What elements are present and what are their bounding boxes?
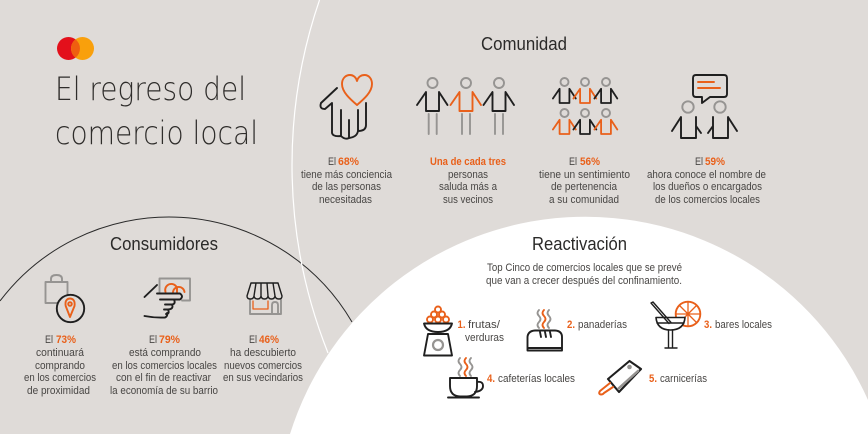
text: una de cada tres: Una de cada tres bbox=[430, 156, 506, 168]
text: 46%: ha descubierto bbox=[230, 347, 296, 359]
text: 59%: ahora conoce el nombre de bbox=[647, 169, 766, 181]
text: 68%: necesitadas bbox=[319, 194, 372, 206]
text: 56%: El bbox=[569, 156, 577, 168]
text: 79%: está comprando bbox=[129, 347, 201, 359]
item 2: panaderías: 2. bbox=[567, 319, 575, 331]
text: 73%: continuará bbox=[36, 347, 85, 359]
icon: six people bbox=[553, 78, 617, 134]
text: 79%: con el fin de reactivar bbox=[116, 372, 211, 384]
icon: scale with fruit bbox=[424, 306, 452, 356]
title bbox=[55, 70, 258, 152]
text: 46%: 46% bbox=[259, 334, 279, 346]
item 3: bares locales: 3. bbox=[704, 319, 712, 331]
text: 56%: 56% bbox=[580, 156, 600, 168]
text: 56%: tiene un sentimiento bbox=[539, 169, 630, 181]
text: una de cada tres: personas bbox=[448, 169, 488, 181]
item 1: frutas verduras: verduras bbox=[465, 332, 504, 344]
black arc: consumers area bbox=[0, 217, 352, 322]
text: 73% bbox=[24, 334, 96, 397]
text: 46%: nuevos comercios bbox=[224, 360, 302, 372]
text: 59%: de los comercios locales bbox=[655, 194, 760, 206]
item 2: panaderías: panaderías bbox=[578, 319, 627, 331]
title: El regreso del bbox=[55, 70, 246, 108]
item 1: frutas verduras: 1. bbox=[458, 319, 466, 331]
text: 46% bbox=[223, 334, 303, 384]
text: 68%: de las personas bbox=[312, 181, 381, 193]
icon: coffee cup with steam bbox=[448, 358, 483, 398]
icon: hand holding card bbox=[144, 278, 190, 318]
text: 46%: El bbox=[249, 334, 257, 346]
text: 56%: a su comunidad bbox=[549, 194, 619, 206]
text: 56% bbox=[539, 156, 630, 206]
item 4: cafeterías locales: cafeterías locales bbox=[498, 373, 575, 385]
item 4: cafeterías locales: 4. bbox=[487, 373, 495, 385]
text: 73%: comprando bbox=[35, 360, 85, 372]
text: 79%: 79% bbox=[159, 334, 180, 346]
heading: Reactivación: Reactivación bbox=[532, 233, 627, 254]
icon: storefront with awning bbox=[247, 283, 282, 314]
text: 56%: de pertenencia bbox=[551, 181, 618, 193]
icon: three people bbox=[417, 78, 514, 134]
text: 73%: El bbox=[45, 334, 53, 346]
icon: bread with steam bbox=[528, 310, 562, 350]
item 1: frutas verduras: frutas/ bbox=[468, 319, 501, 331]
icon: cocktail with orange slice bbox=[651, 302, 700, 348]
item 1: frutas verduras bbox=[458, 319, 504, 344]
item 5: carnicerías: 5. bbox=[649, 373, 657, 385]
text: 59%: los dueños o encargados bbox=[653, 181, 762, 193]
text: 79%: en los comercios locales bbox=[112, 360, 217, 372]
item 3: bares locales: bares locales bbox=[715, 319, 772, 331]
text: 79%: El bbox=[149, 334, 157, 346]
text: 59% bbox=[647, 156, 766, 206]
white panel: reactivation bbox=[290, 217, 868, 434]
text: 59%: 59% bbox=[705, 156, 725, 168]
text: top five intro: que van a crecer después del confinamiento. bbox=[486, 275, 682, 287]
icon: butcher cleaver bbox=[599, 361, 641, 394]
text: 68%: tiene más conciencia bbox=[301, 169, 393, 181]
text: 68% bbox=[301, 156, 393, 206]
text: top five intro bbox=[486, 262, 682, 287]
title: comercio local bbox=[55, 114, 258, 152]
heading: Comunidad: Comunidad bbox=[481, 33, 567, 54]
text: 68%: 68% bbox=[338, 156, 359, 168]
text: 59%: El bbox=[695, 156, 703, 168]
text: una de cada tres bbox=[430, 156, 506, 206]
logo: overlapping circles bbox=[57, 37, 94, 60]
text: una de cada tres: saluda más a bbox=[439, 181, 498, 193]
text: 79%: la economía de su barrio bbox=[110, 385, 218, 397]
white arc: community area bbox=[292, 0, 328, 353]
text: 73%: 73% bbox=[56, 334, 76, 346]
text: 46%: en sus vecindarios bbox=[223, 372, 303, 384]
icon: shopping bag with location pin bbox=[46, 275, 84, 322]
text: una de cada tres: sus vecinos bbox=[443, 194, 493, 206]
icon: hand with heart bbox=[320, 75, 372, 139]
text: 79% bbox=[110, 334, 218, 397]
heading: Consumidores: Consumidores bbox=[110, 233, 218, 254]
text: top five intro: Top Cinco de comercios locales que se prevé bbox=[487, 262, 682, 274]
text: 73%: en los comercios bbox=[24, 372, 96, 384]
text: 68%: El bbox=[328, 156, 336, 168]
item 5: carnicerías: carnicerías bbox=[660, 373, 707, 385]
icon: two people talking bbox=[672, 75, 737, 138]
text: 73%: de proximidad bbox=[27, 385, 90, 397]
